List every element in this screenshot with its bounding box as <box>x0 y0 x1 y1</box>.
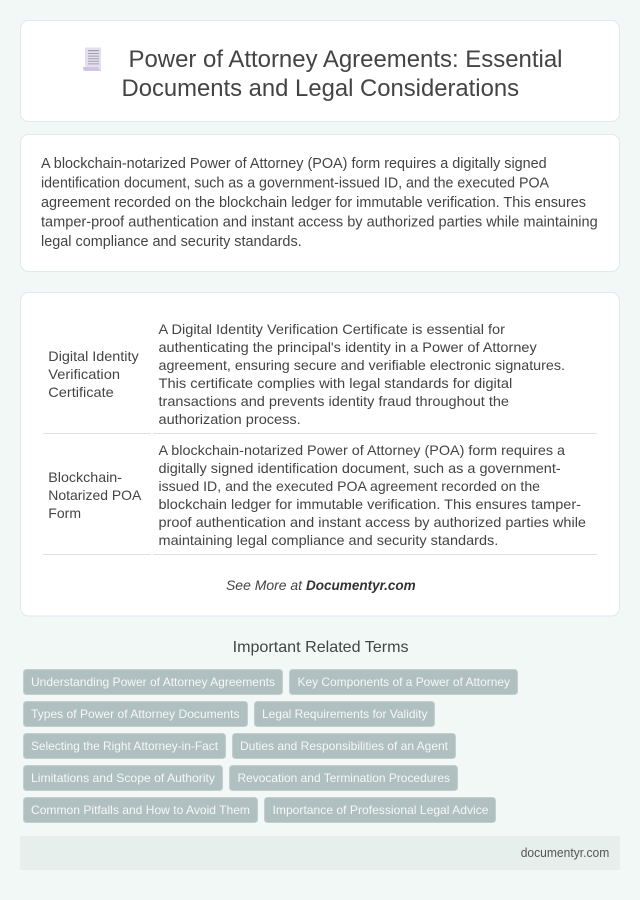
footer bar <box>20 836 620 870</box>
table row: digital identity verification certificate: agreement, ensuring secure and verifiable electronic signatures. <box>158 357 565 373</box>
chip <box>24 670 282 694</box>
title: Documents and Legal Considerations <box>122 75 519 102</box>
table row: digital identity verification certificate: authenticating the principal's identity in a Power of Attorney <box>158 339 537 355</box>
panel: documents table <box>20 292 620 616</box>
chip: Legal Requirements for Validity <box>262 707 428 721</box>
chip <box>232 734 456 758</box>
chip: Revocation and Termination Procedures <box>238 771 450 785</box>
table row: blockchain-notarized POA form: blockchain ledger for immutable verification. This ensures tamper- <box>158 496 581 512</box>
chip: Common Pitfalls and How to Avoid Them <box>31 803 250 817</box>
table row: digital identity verification certificate <box>43 321 597 434</box>
panel: title card <box>20 20 620 122</box>
chip: Importance of Professional Legal Advice <box>272 803 489 817</box>
table row: blockchain-notarized POA form: digitally signed identification document, such as a government- <box>158 460 561 476</box>
table row: blockchain-notarized POA form: issued ID, and the executed POA agreement recorded on the <box>158 478 540 494</box>
table row: digital identity verification certificate: authorization process. <box>158 411 301 427</box>
table row: digital identity verification certificate: Digital Identity <box>48 348 139 364</box>
table row: blockchain-notarized POA form: A blockchain-notarized Power of Attorney (POA) form requires a <box>158 442 565 458</box>
text block: summary paragraph: agreement recorded on the blockchain ledger for immutable verification. This ensures <box>41 195 586 211</box>
title: Power of Attorney Agreements: Essential <box>128 46 562 73</box>
chip <box>24 766 222 790</box>
chip: Types of Power of Attorney Documents <box>31 707 240 721</box>
text block: summary paragraph: A blockchain-notarized Power of Attorney (POA) form requires a digitally signed <box>41 156 547 172</box>
chip <box>254 702 434 726</box>
table row: blockchain-notarized POA form: proof authentication and instant access by authorized parties while <box>158 514 586 530</box>
table row: digital identity verification certificate: This certificate complies with legal standards for digital <box>158 375 512 391</box>
text block: summary paragraph <box>41 156 598 250</box>
chip: Selecting the Right Attorney-in-Fact <box>31 739 219 753</box>
text block: summary paragraph: tamper-proof authentication and instant access by authorized parties while maintaining <box>41 214 598 230</box>
table row: blockchain-notarized POA form <box>43 442 597 555</box>
table row: blockchain-notarized POA form: Form <box>48 505 81 521</box>
heading: important related terms: Important Related Terms <box>233 639 409 656</box>
text block: summary paragraph: identification document, such as a government-issued ID, and the executed POA <box>41 176 549 192</box>
footer bar: documentyr.com <box>521 845 609 860</box>
chip: Key Components of a Power of Attorney <box>298 675 510 689</box>
panel: summary text <box>20 134 620 272</box>
text block: summary paragraph: legal compliance and security standards. <box>41 234 302 250</box>
table row: blockchain-notarized POA form: Blockchain- <box>48 469 122 485</box>
chip: Understanding Power of Attorney Agreements <box>31 675 275 689</box>
chip <box>24 734 226 758</box>
chip: Limitations and Scope of Authority <box>31 771 215 785</box>
table row: blockchain-notarized POA form: Notarized POA <box>48 487 142 503</box>
chip <box>290 670 518 694</box>
chip <box>24 798 258 822</box>
title <box>122 46 562 102</box>
chip <box>24 702 248 726</box>
see more link <box>226 577 416 593</box>
see more link: Documentyr.com <box>306 577 416 593</box>
related terms chips <box>24 670 518 822</box>
see more link: See More at <box>226 577 303 593</box>
chip <box>230 766 458 790</box>
table row: digital identity verification certificate: A Digital Identity Verification Certificate is essential for <box>158 321 505 337</box>
table row: digital identity verification certificate: Verification <box>48 366 120 382</box>
table row: digital identity verification certificate: transactions and prevents identity fraud throughout the <box>158 393 509 409</box>
table row: digital identity verification certificate: Certificate <box>48 384 114 400</box>
chip: Duties and Responsibilities of an Agent <box>240 739 449 753</box>
chip <box>264 798 496 822</box>
table row: blockchain-notarized POA form: maintaining legal compliance and security standards. <box>158 532 498 548</box>
icon: document scroll <box>83 48 101 71</box>
